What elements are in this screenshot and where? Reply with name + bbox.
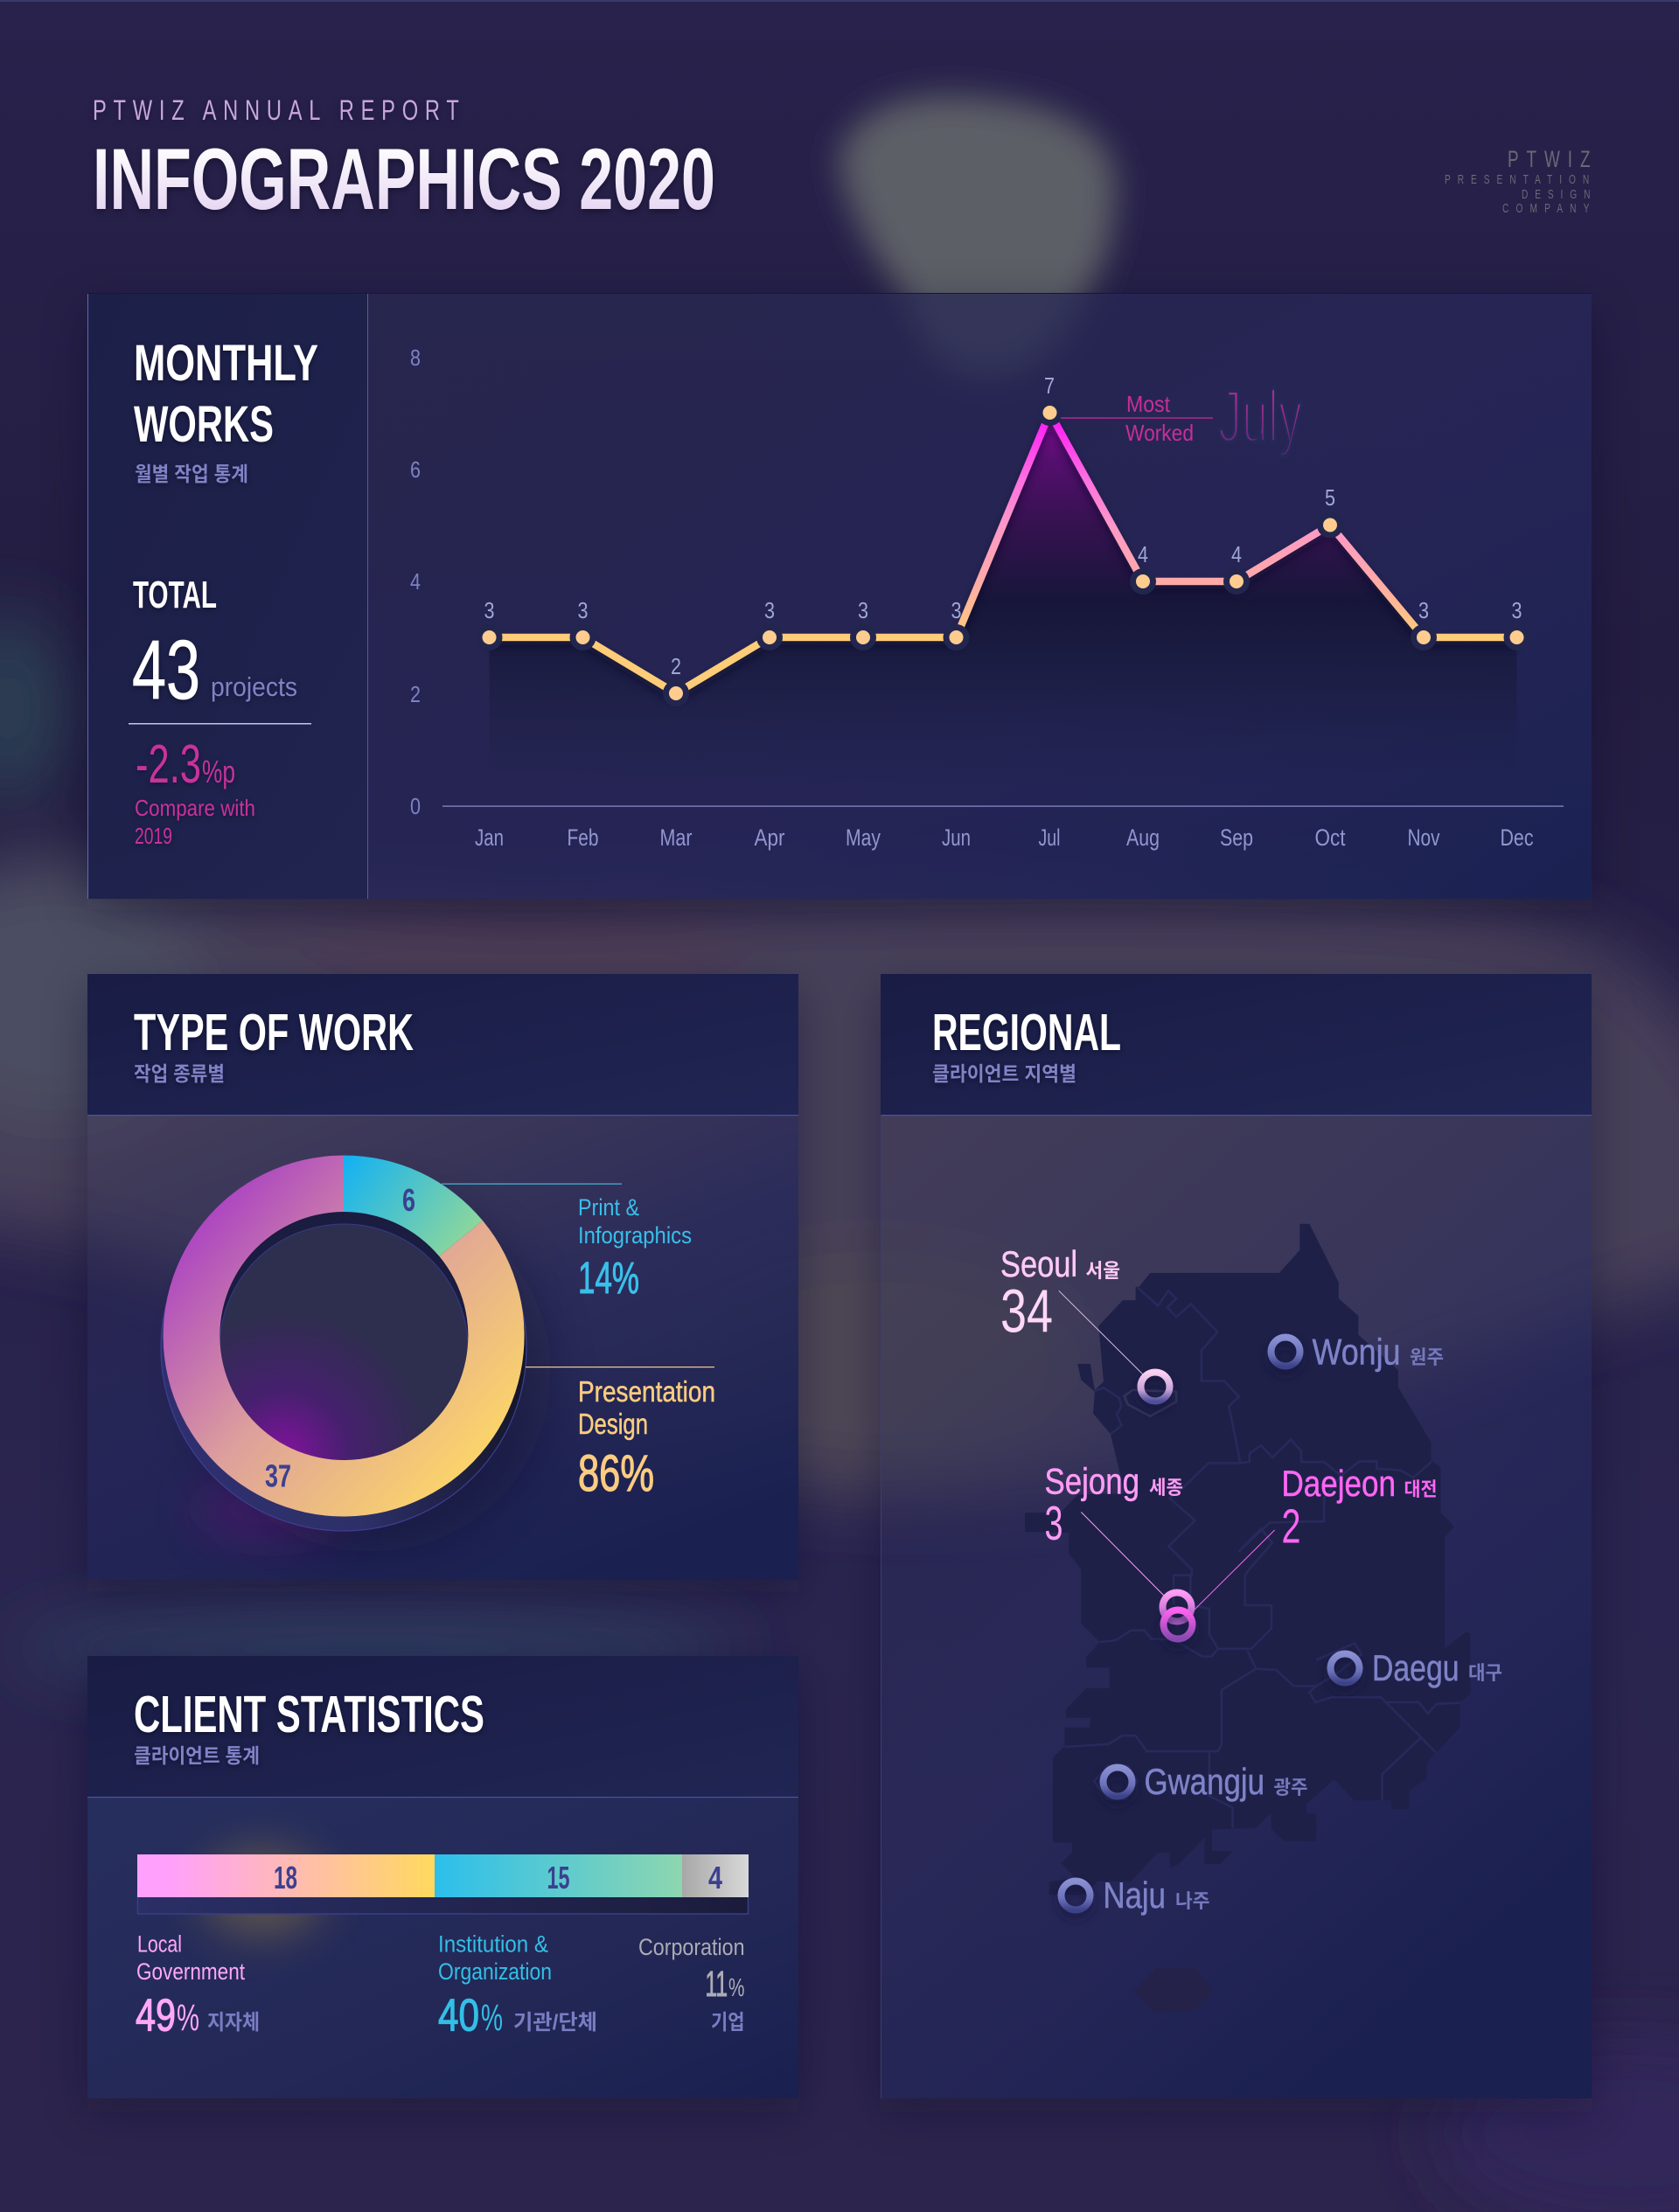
marker: Seoul: [1000, 1243, 1170, 1408]
value labels: 4: [1138, 541, 1148, 567]
marker: Sejong: 3: [1044, 1496, 1063, 1550]
callout: most worked July: [1061, 375, 1302, 457]
month labels: [475, 824, 1534, 851]
stat: local government: Local: [137, 1930, 182, 1957]
legend: presentation design: Presentation: [578, 1375, 715, 1408]
marker: Daejeon: Daejeon: [1282, 1463, 1396, 1504]
donut chart: [161, 1155, 551, 1552]
month labels: Dec: [1501, 824, 1534, 851]
map of South Korea: [1025, 1224, 1470, 2013]
y axis labels: 8: [410, 344, 421, 371]
company logotype: [1445, 146, 1590, 215]
data line: [490, 413, 1516, 693]
company logotype: PRESENTATION: [1445, 172, 1589, 186]
value labels: 2: [671, 653, 681, 679]
year-over-year change: 2019: [135, 823, 172, 849]
segment 14%: [344, 1155, 483, 1256]
heading: 클라이언트 통계: [134, 1744, 260, 1767]
main segment 86%: [164, 1156, 525, 1516]
callout: most worked July: Worked: [1125, 420, 1194, 446]
stat: local government: 지자체: [207, 2011, 260, 2035]
heading: CLIENT STATISTICS: [134, 1686, 484, 1743]
panel: regional: [881, 974, 1592, 2098]
stat: local government: 49: [136, 1990, 176, 2041]
value labels: 3: [764, 597, 775, 623]
month labels: Feb: [567, 824, 598, 851]
stat: institution and organization: %: [481, 1997, 503, 2039]
y axis labels: 0: [410, 793, 421, 819]
marker: Sejong: Sejong: [1044, 1460, 1139, 1502]
value labels: 3: [951, 597, 962, 623]
marker: Daegu: [1330, 1647, 1502, 1689]
area under the line: [490, 413, 1516, 787]
total stat: TOTAL: [133, 574, 217, 616]
stat: local government: [136, 1930, 260, 2041]
main title: INFOGRAPHICS 2020: [93, 130, 715, 227]
marker: Gwangju: Gwangju: [1144, 1761, 1264, 1802]
heading: REGIONAL: [932, 1004, 1121, 1061]
eyebrow: PTWIZ ANNUAL REPORT: [93, 95, 459, 126]
data points: [476, 400, 1530, 706]
heading: [134, 1686, 484, 1767]
marker: Daejeon: 2: [1282, 1499, 1301, 1553]
heading: TYPE OF WORK: [134, 1004, 414, 1061]
year-over-year change: Compare with: [135, 795, 255, 821]
callout: most worked July: Most: [1126, 391, 1171, 417]
marker: Gwangju: [1103, 1761, 1308, 1803]
month labels: Oct: [1315, 824, 1346, 851]
legend: presentation design: Design: [578, 1408, 648, 1440]
marker: Wonju: Wonju: [1312, 1331, 1401, 1373]
stat: corporation: [638, 1934, 745, 2035]
legend: presentation design: 86%: [578, 1445, 654, 1502]
heading: [134, 1004, 414, 1085]
legend: print and infographics: Print &: [578, 1194, 639, 1221]
stat: corporation: 11: [705, 1964, 728, 2004]
stat: local government: %: [177, 1997, 199, 2039]
marker: Daegu: Daegu: [1372, 1647, 1459, 1688]
stat: institution and organization: [438, 1930, 597, 2041]
month labels: May: [846, 824, 881, 851]
marker: Naju: Naju: [1104, 1875, 1166, 1916]
marker: Seoul: 서울: [1086, 1260, 1120, 1282]
month labels: Aug: [1126, 824, 1160, 851]
stat: institution and organization: 40: [438, 1990, 479, 2041]
stat: institution and organization: Organization: [438, 1958, 552, 1985]
year-over-year change: %p: [202, 754, 235, 790]
y axis labels: 4: [410, 568, 421, 595]
heading: 작업 종류별: [134, 1062, 225, 1085]
line chart: [410, 344, 1564, 851]
panel shadows: [87, 306, 1592, 2111]
total stat: 43: [132, 623, 200, 717]
marker: Daejeon: [1163, 1463, 1438, 1645]
company logotype: PTWIZ: [1508, 146, 1590, 172]
stat: corporation: %: [728, 1974, 745, 2002]
month labels: Nov: [1408, 824, 1440, 851]
value labels: [484, 372, 1522, 679]
year-over-year change: -2.3: [136, 734, 201, 795]
sidebar heading: WORKS: [134, 396, 274, 453]
sidebar heading: 월별 작업 통계: [135, 463, 248, 485]
title block: [93, 95, 715, 227]
marker: Naju: 나주: [1175, 1890, 1210, 1912]
stat: local government: Government: [136, 1958, 245, 1985]
value labels: 3: [1418, 597, 1429, 623]
value labels: 3: [577, 597, 588, 623]
month labels: Jun: [942, 824, 971, 851]
month labels: Mar: [659, 824, 693, 851]
marker: Seoul: Seoul: [1000, 1243, 1077, 1284]
month labels: Jul: [1039, 824, 1060, 851]
stat: corporation: Corporation: [638, 1934, 745, 1960]
month labels: Jan: [475, 824, 504, 851]
marker: Naju: [1061, 1875, 1210, 1916]
company logotype: COMPANY: [1502, 201, 1590, 215]
stat: institution and organization: Institution &: [438, 1930, 548, 1957]
stat: corporation: 기업: [711, 2011, 745, 2035]
legend: print and infographics: [442, 1184, 692, 1303]
company logotype: DESIGN: [1522, 187, 1590, 201]
sidebar heading: [134, 335, 318, 485]
marker: Daejeon: 대전: [1404, 1478, 1438, 1500]
legend: print and infographics: Infographics: [578, 1222, 692, 1249]
month labels: Apr: [754, 824, 785, 851]
value labels: 3: [484, 597, 495, 623]
Jeju island: [1134, 1968, 1214, 2013]
value labels: 3: [1511, 597, 1522, 623]
stacked bar: 4: [708, 1860, 722, 1896]
stacked bar: [137, 1849, 749, 1937]
heading: 클라이언트 지역별: [932, 1062, 1076, 1085]
y axis labels: [410, 344, 421, 819]
stacked bar: 18: [274, 1860, 297, 1896]
marker: Daegu: 대구: [1468, 1662, 1502, 1684]
stat: institution and organization: 기관/단체: [513, 2011, 597, 2035]
value labels: 3: [858, 597, 868, 623]
stacked bar: 15: [547, 1860, 570, 1896]
segment values: 6: [402, 1182, 415, 1218]
value labels: 5: [1325, 484, 1335, 511]
callout: most worked July: July: [1218, 375, 1302, 457]
marker: Seoul: 34: [1000, 1276, 1053, 1345]
panel: monthly works: [87, 293, 1592, 899]
y axis labels: 2: [410, 681, 421, 707]
marker: Sejong: [1044, 1460, 1191, 1621]
marker: Gwangju: 광주: [1273, 1777, 1308, 1798]
panel: client statistics: [87, 1656, 798, 2098]
donut chart: 37: [265, 1458, 291, 1493]
month labels: Sep: [1220, 824, 1253, 851]
value labels: 7: [1044, 372, 1055, 399]
marker: Wonju: [1271, 1331, 1444, 1373]
sidebar heading: MONTHLY: [134, 335, 318, 392]
year-over-year change: [135, 734, 255, 849]
total stat: [132, 574, 297, 717]
legend: presentation design: [526, 1367, 715, 1502]
panel: type of work: [87, 974, 798, 1580]
total stat: projects: [211, 671, 297, 702]
value labels: 4: [1231, 541, 1242, 567]
y axis labels: 6: [410, 456, 421, 483]
legend: print and infographics: 14%: [578, 1253, 639, 1303]
heading: [932, 1004, 1121, 1085]
marker: Wonju: 원주: [1410, 1346, 1444, 1368]
marker: Sejong: 세종: [1149, 1477, 1183, 1499]
